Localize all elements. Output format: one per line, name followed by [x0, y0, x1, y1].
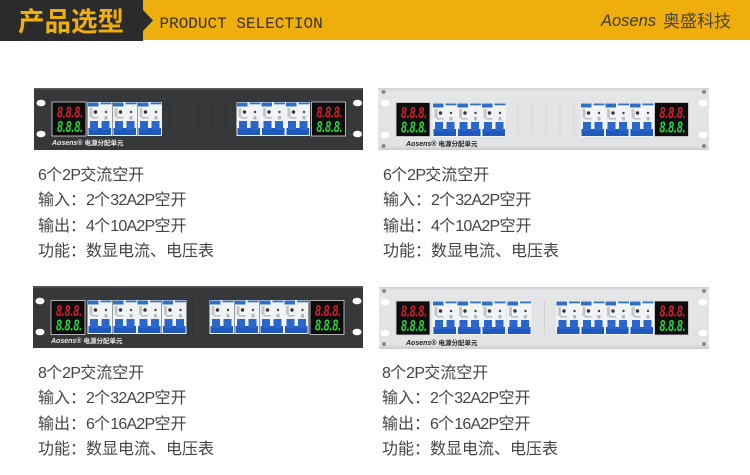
panel label: Aosens® 电源分配单元 [50, 336, 123, 345]
breakers: left [88, 300, 186, 334]
breakers: left [432, 103, 506, 137]
text block: black 6-breaker specs [38, 166, 214, 260]
panel: black 8-breaker unit [33, 286, 363, 348]
breakers: right [580, 103, 654, 137]
meter: right [654, 301, 688, 335]
text block: silver 8-breaker specs [382, 364, 558, 458]
text block: silver 6-breaker specs: 输入：2个32A2P空开 [383, 191, 532, 209]
panel label: Aosens® 电源分配单元 [405, 338, 478, 347]
text block: black 8-breaker specs: 输出：6个16A2P空开 [38, 415, 186, 433]
text block: black 8-breaker specs: 功能：数显电流、电压表 [38, 440, 214, 458]
breakers: left [432, 301, 532, 335]
text block: silver 6-breaker specs: 功能：数显电流、电压表 [383, 242, 559, 260]
text block: black 8-breaker specs [38, 364, 214, 458]
panel: silver 8-breaker unit [379, 287, 709, 349]
breakers: left [88, 102, 162, 136]
panel label: Aosens® 电源分配单元 [51, 138, 124, 147]
subtitle: PRODUCT SELECTION [160, 15, 323, 33]
title: 产品选型 [18, 0, 124, 39]
brand name: Aosens [600, 12, 656, 30]
text block: silver 6-breaker specs: 6个2P交流空开 [383, 166, 489, 184]
text block: black 6-breaker specs: 输出：4个10A2P空开 [38, 217, 186, 235]
text block: silver 8-breaker specs: 8个2P交流空开 [382, 364, 488, 382]
panel label: Aosens® 电源分配单元 [405, 139, 478, 148]
text block: silver 8-breaker specs: 输入：2个32A2P空开 [382, 389, 530, 407]
panel: silver 6-breaker unit [378, 88, 709, 150]
text block: black 6-breaker specs: 输入：2个32A2P空开 [38, 191, 186, 209]
breakers: right [210, 300, 308, 334]
text block: black 8-breaker specs: 8个2P交流空开 [38, 364, 144, 382]
icon: header arrow [143, 10, 153, 31]
breakers: right [236, 102, 310, 136]
panel: black 6-breaker unit [34, 88, 363, 150]
meter: right [654, 102, 688, 136]
meter: left [51, 300, 85, 334]
meter: right [312, 102, 346, 136]
text block: black 8-breaker specs: 输入：2个32A2P空开 [38, 389, 186, 407]
header bar [0, 0, 750, 41]
text block: silver 8-breaker specs: 功能：数显电流、电压表 [382, 440, 558, 458]
breakers: right [556, 301, 654, 335]
meter: left [396, 102, 430, 136]
text block: silver 6-breaker specs [383, 166, 559, 260]
text block: silver 8-breaker specs: 输出：6个16A2P空开 [382, 415, 530, 433]
brand name chinese: 奥盛科技 [663, 12, 731, 31]
text block: black 6-breaker specs: 6个2P交流空开 [38, 166, 144, 184]
text block: silver 6-breaker specs: 输出：4个10A2P空开 [383, 217, 532, 235]
meter: right [310, 300, 344, 334]
meter: left [52, 102, 86, 136]
meter: left [396, 301, 430, 335]
text block: black 6-breaker specs: 功能：数显电流、电压表 [38, 242, 214, 260]
